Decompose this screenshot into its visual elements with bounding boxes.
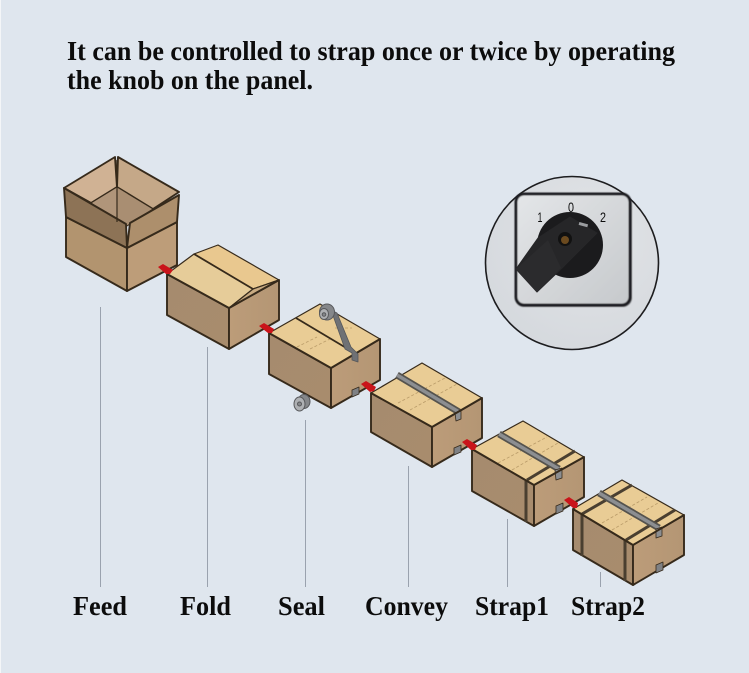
connector: red tab 2 bbox=[259, 323, 274, 333]
strap bbox=[397, 375, 459, 412]
icon: tape roll bottom bbox=[294, 394, 310, 411]
step labels: Feed bbox=[73, 591, 127, 621]
box: convey bbox=[371, 363, 482, 467]
knob handle bbox=[516, 217, 597, 292]
connector: red tab 4 bbox=[462, 439, 477, 450]
connector: red tab 5 bbox=[564, 497, 578, 508]
box: strap2 bbox=[573, 480, 684, 585]
connector: red tab 1 bbox=[158, 264, 173, 274]
box: fold bbox=[167, 245, 279, 349]
knob numbers: 0 bbox=[568, 199, 574, 215]
knob numbers: 2 bbox=[600, 209, 606, 225]
icon: tab lower bbox=[352, 387, 359, 397]
step labels: Seal bbox=[278, 591, 325, 621]
step labels bbox=[73, 591, 645, 621]
leader lines bbox=[100, 307, 600, 587]
box: feed (open box) bbox=[64, 157, 179, 291]
step labels: Fold bbox=[180, 591, 231, 621]
knob numbers: 1 bbox=[538, 209, 543, 225]
box: seal with tape head bbox=[269, 304, 380, 411]
box: strap1 bbox=[472, 421, 584, 526]
title: It can be controlled to strap once or twice by operating bbox=[67, 35, 675, 66]
step labels: Strap1 bbox=[475, 591, 549, 621]
icon: tape band bbox=[331, 310, 358, 362]
icon: tape roll top bbox=[320, 304, 334, 320]
step labels: Strap2 bbox=[571, 591, 645, 621]
plate bbox=[515, 194, 632, 307]
panel: rotary knob bbox=[486, 176, 658, 350]
knob disc bbox=[537, 212, 603, 278]
connector: red tab 3 bbox=[361, 381, 376, 392]
title: the knob on the panel. bbox=[67, 64, 313, 95]
knob numbers bbox=[538, 199, 606, 225]
step labels: Convey bbox=[365, 591, 448, 621]
title bbox=[67, 35, 675, 95]
